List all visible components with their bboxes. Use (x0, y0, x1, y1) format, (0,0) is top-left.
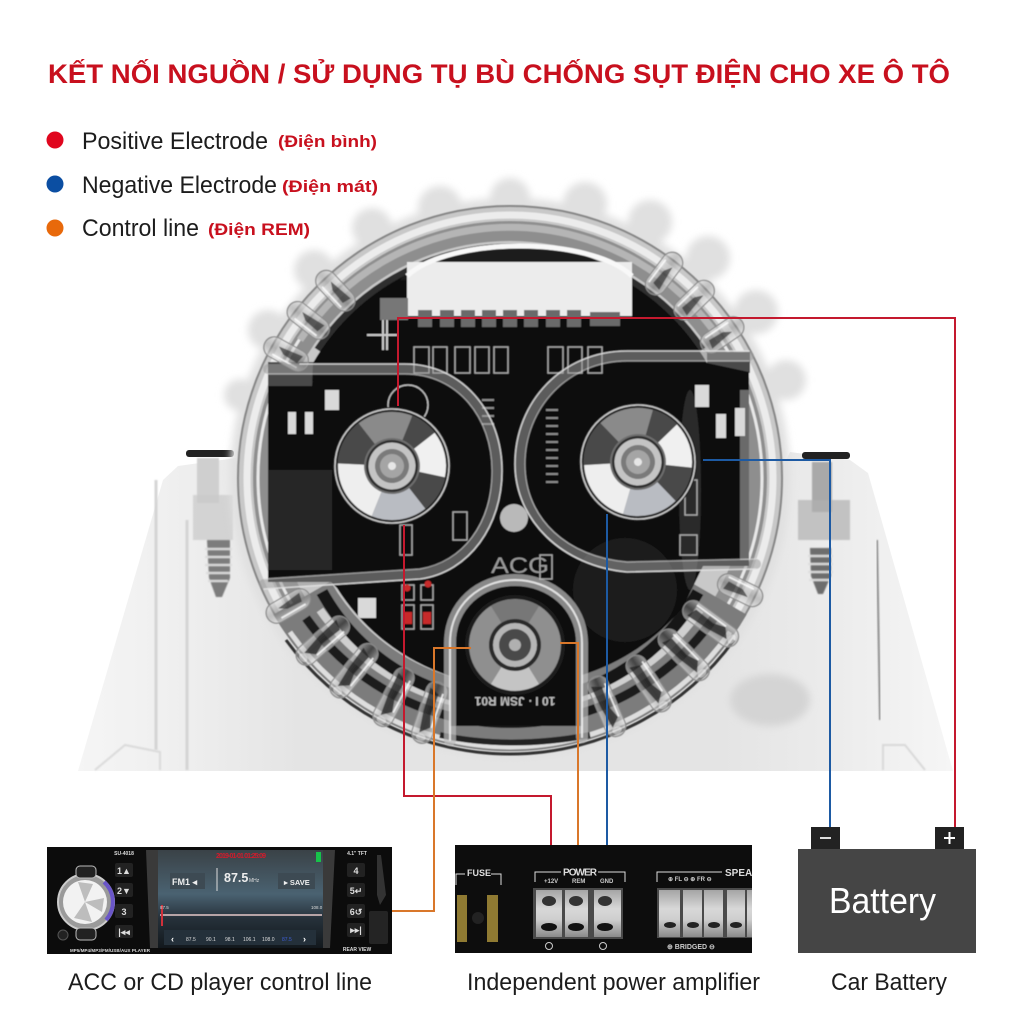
radio: screen: 106.1 (243, 937, 256, 943)
wires (392, 318, 955, 911)
radio: screen: › (303, 934, 306, 944)
amplifier: speaker terminals: ⊕ BRIDGED ⊖ (667, 944, 715, 951)
radio: screen: 108.0 (262, 937, 275, 943)
amplifier: power terminals: +12V (544, 879, 558, 885)
radio: screen: 87.5 (160, 905, 169, 910)
wire: right terminal to amplifier GND (606, 514, 608, 890)
battery (798, 827, 976, 953)
top crescent and white label (380, 244, 632, 327)
caption: battery: Car Battery (831, 969, 947, 996)
radio: left buttons: 1▲ (117, 866, 131, 876)
amplifier: speaker terminals (656, 869, 752, 950)
legend: positive electrode (46, 128, 377, 155)
radio: left buttons: 2▼ (117, 886, 131, 896)
screw right (798, 462, 850, 594)
radio: right buttons: 6↺ (350, 907, 363, 917)
terminal: left (325, 399, 459, 533)
left plus marking (388, 385, 428, 425)
bottom silver text band: 10 I · JSM R01 (474, 694, 555, 708)
radio: left buttons: 3 (121, 907, 127, 917)
radio: right buttons: REAR VIEW (343, 947, 371, 953)
screw left (193, 458, 233, 597)
radio: screen: 87.5 (282, 937, 292, 943)
amplifier: speaker terminals: SPEAK (725, 868, 760, 879)
legend: control line (46, 215, 310, 242)
legend: negative electrode: (Điện mát) (282, 178, 378, 196)
legend: negative electrode (46, 172, 378, 199)
title: KẾT NỐI NGUỒN / SỬ DỤNG TỤ BÙ CHỐNG SỤT ĐIỆN CHO XE Ô TÔ (48, 57, 950, 89)
radio: left buttons (70, 851, 151, 953)
radio: left buttons: |◂◂ (118, 927, 130, 937)
radio: screen: 98.1 (225, 937, 235, 943)
radio: left buttons: SU-4018 (114, 851, 134, 857)
chip pins (482, 400, 558, 482)
radio: right buttons (343, 851, 371, 953)
radio: right buttons: 4.1" TFT (347, 851, 367, 857)
radio: screen: 2019-01-01 01:25:09 (216, 853, 266, 860)
radio: screen: MHz (249, 878, 260, 884)
wire: bottom terminal to radio (392, 648, 471, 911)
pads (288, 385, 745, 618)
radio: screen: ‹ (171, 934, 174, 944)
legend: negative electrode: Negative Electrode (82, 172, 277, 199)
glass loops (264, 351, 756, 740)
radio: screen: 90.1 (206, 937, 216, 943)
caption: amplifier: Independent power amplifier (467, 969, 760, 996)
ACG label: ACG (491, 553, 549, 578)
radio: screen: 87.5 (224, 871, 248, 885)
radio: right buttons: ▸▸| (349, 925, 362, 935)
circuit board (267, 277, 750, 726)
resistor pads (400, 347, 697, 629)
radio: screen: FM1 ◂ (172, 877, 198, 887)
radio: card slot (377, 855, 386, 905)
wire: battery plus to left terminal (398, 318, 955, 827)
amplifier: fuse (456, 868, 501, 942)
car radio (47, 847, 392, 954)
caption: radio: ACC or CD player control line (68, 969, 372, 996)
amplifier: power terminals: GND (600, 879, 614, 885)
radio: screen: 108.0 (311, 905, 323, 910)
radio: right buttons: 4 (353, 866, 359, 876)
terminal: bottom (465, 595, 565, 695)
radio: knob (58, 866, 114, 940)
legend: control line: (Điện REM) (208, 221, 310, 239)
radio: screen (158, 850, 323, 948)
legend (46, 128, 378, 242)
terminal: right (566, 390, 710, 534)
glass outer ring (238, 206, 782, 750)
red LEDs (404, 580, 432, 624)
plus sign on board (367, 317, 397, 350)
wire: left terminal to amplifier +12V (404, 525, 551, 873)
capacitor body (238, 206, 782, 754)
outer bumps behind ring (224, 178, 806, 758)
legend: positive electrode: (Điện bình) (278, 133, 377, 151)
battery: Battery (829, 880, 936, 921)
ribs (260, 248, 766, 746)
amplifier (455, 845, 760, 953)
radio: right buttons: 5↵ (350, 886, 362, 896)
electrolytic capacitor (500, 504, 528, 532)
radio: left buttons: MP5/MP4/MP3/FM/USB/AUX PLAYER (70, 948, 151, 953)
amplifier: fuse: FUSE (467, 868, 491, 878)
wire: bottom terminal to amplifier REM (560, 643, 578, 875)
amplifier: power terminals (533, 868, 625, 950)
amplifier: power terminals: REM (572, 879, 585, 885)
radio: screen: 87.5 (186, 937, 196, 943)
dark corners beside board (268, 352, 750, 386)
radio: screen: ▸ SAVE (283, 878, 310, 887)
wire: battery minus to right terminal (703, 460, 830, 828)
radio: side panels (146, 850, 158, 948)
clear plastic mount (78, 450, 953, 771)
amplifier: power terminals: POWER (563, 868, 598, 878)
amplifier: speaker terminals: ⊕ FL ⊖ ⊕ FR ⊖ (668, 877, 712, 883)
right plus marking (614, 407, 654, 420)
legend: positive electrode: Positive Electrode (82, 128, 268, 155)
legend: control line: Control line (82, 215, 199, 242)
ring lower silver band (286, 592, 734, 754)
